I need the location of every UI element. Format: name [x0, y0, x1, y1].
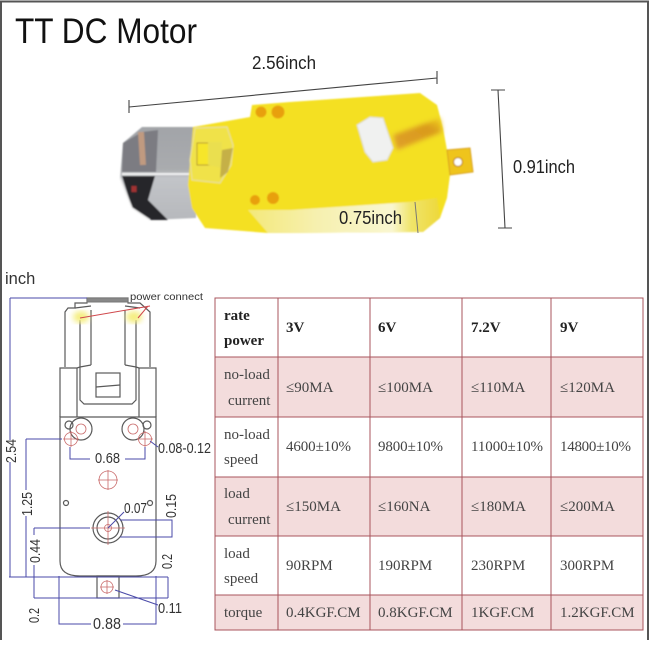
drawing: dimension labels: 0.15	[163, 494, 180, 518]
table: no-load current row: ≤90MA	[286, 380, 334, 396]
table: no-load speed row: speed	[224, 452, 259, 468]
table: load speed row: 90RPM	[286, 558, 333, 574]
specification table	[215, 298, 643, 630]
table: torque row: 0.8KGF.CM	[378, 605, 453, 621]
table: load current row: ≤150MA	[286, 499, 341, 515]
table: no-load current row: no-load	[224, 367, 270, 383]
dimension: length: 2.56inch	[252, 53, 316, 73]
table: header row	[224, 308, 578, 349]
table: shaded rows	[215, 357, 643, 630]
output shaft shadow	[393, 118, 442, 150]
table: load speed row: load	[224, 546, 250, 562]
unit label: inch	[5, 270, 35, 288]
dimension: height	[491, 90, 575, 228]
dimension: width: 0.75inch	[339, 208, 402, 228]
yellow gearbox	[188, 93, 473, 233]
motor photo	[120, 93, 473, 233]
table: header row: 3V	[286, 320, 304, 336]
table: no-load current row: ≤100MA	[378, 380, 433, 396]
table: load speed row: speed	[224, 571, 259, 587]
table: no-load speed row: 14800±10%	[560, 439, 631, 455]
table: no-load speed row: 11000±10%	[471, 439, 543, 455]
drawing: holes	[63, 418, 153, 594]
table: torque row: torque	[224, 605, 263, 621]
dimension: length	[129, 53, 437, 113]
gearbox pale lower face	[248, 198, 440, 233]
table: load current row: current	[228, 512, 271, 528]
clip	[190, 127, 233, 183]
table: no-load speed row: 4600±10%	[286, 439, 351, 455]
drawing: power connection highlights	[73, 311, 142, 323]
table: header row: 9V	[560, 320, 578, 336]
drawing: dimension labels: 0.08-0.12	[158, 440, 211, 457]
table: load current row: ≤180MA	[471, 499, 526, 515]
table: torque row	[224, 605, 635, 621]
table: load current row	[224, 486, 615, 528]
drawing: dimension labels: 0.88	[93, 616, 121, 633]
table: load speed row	[224, 546, 614, 587]
drawing: dimension labels: 0.11	[158, 600, 182, 617]
drawing: dimension labels: 2.54	[3, 439, 20, 463]
table: torque row: 1.2KGF.CM	[560, 605, 635, 621]
title: TT DC Motor	[15, 12, 197, 51]
table: no-load current row: current	[228, 393, 271, 409]
table: no-load speed row: 9800±10%	[378, 439, 443, 455]
drawing: dimension labels: 0.07	[124, 500, 147, 517]
technical drawing	[3, 291, 211, 633]
table: grid	[215, 298, 643, 630]
table: no-load current row: ≤110MA	[471, 380, 526, 396]
drawing: dimension labels: 1.25	[19, 492, 36, 516]
dimension: height: 0.91inch	[513, 157, 575, 177]
table: no-load speed row	[224, 427, 631, 468]
table: load current row: load	[224, 486, 250, 502]
drawing: dimension labels	[3, 291, 211, 633]
drawing: dimension labels: 0.2	[26, 608, 43, 623]
table: header row: 7.2V	[471, 320, 501, 336]
table: torque row: 0.4KGF.CM	[286, 605, 361, 621]
table: no-load current row	[224, 367, 615, 409]
mounting holes	[250, 106, 284, 205]
drawing: dimension labels: power connect	[130, 291, 203, 303]
table: load speed row: 190RPM	[378, 558, 432, 574]
table: header row: power	[224, 333, 264, 349]
table: load current row: ≤200MA	[560, 499, 615, 515]
table: torque row: 1KGF.CM	[471, 605, 534, 621]
drawing: dimension labels: 0.44	[27, 539, 44, 563]
table: header row: rate	[224, 308, 250, 324]
table: load speed row: 230RPM	[471, 558, 525, 574]
table: load speed row: 300RPM	[560, 558, 614, 574]
drawing: dimension labels: 0.68	[95, 450, 120, 467]
table: header row: 6V	[378, 320, 396, 336]
table: load current row: ≤160NA	[378, 499, 431, 515]
drawing: dimension lines	[9, 298, 172, 624]
drawing: dimension labels: 0.2	[159, 554, 176, 569]
tab	[447, 148, 473, 175]
drawing: body outline	[60, 298, 156, 598]
white shaft	[357, 117, 393, 162]
table: no-load current row: ≤120MA	[560, 380, 615, 396]
table: no-load speed row: no-load	[224, 427, 270, 443]
dimension: width	[339, 202, 418, 233]
silver motor can	[120, 127, 196, 220]
